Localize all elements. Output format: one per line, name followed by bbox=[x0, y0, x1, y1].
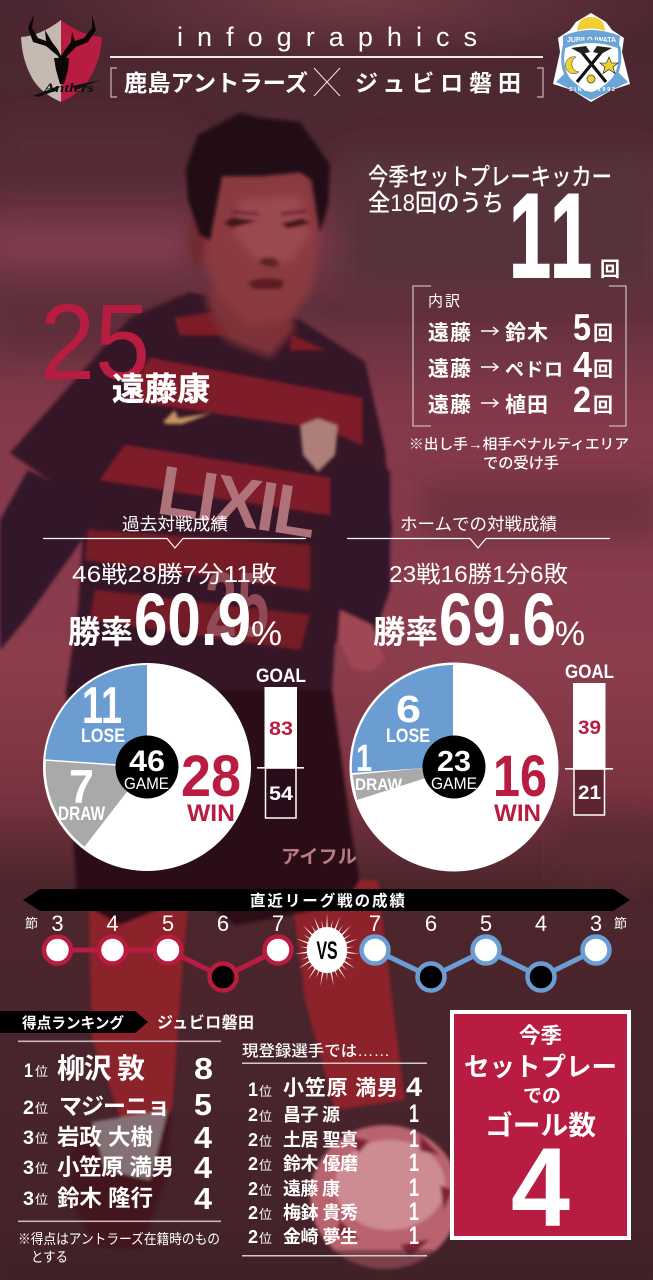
panel: current squad ranking: 位 bbox=[259, 1207, 272, 1222]
callout: set-piece goals bbox=[452, 1012, 629, 1250]
pie chart: all-time: WIN bbox=[187, 800, 235, 827]
goal bar: all-time: GOAL bbox=[256, 666, 306, 687]
panel: scoring ranking: 8 bbox=[194, 1051, 213, 1086]
arms bbox=[0, 470, 88, 650]
panel: scoring ranking: 4 bbox=[194, 1150, 213, 1185]
panel: current squad ranking: 2 bbox=[248, 1105, 258, 1125]
pie chart: home bbox=[350, 662, 558, 872]
set-piece kicker stat: 回 bbox=[600, 259, 620, 281]
panel: current squad ranking: 2 bbox=[248, 1130, 258, 1150]
panel: current squad ranking: 遠藤 康 bbox=[283, 1179, 340, 1199]
panel: current squad ranking: 現登録選手では…… bbox=[242, 1042, 390, 1060]
panel: current squad ranking: 1 bbox=[248, 1080, 258, 1101]
panel: current squad ranking: 4 bbox=[406, 1072, 422, 1102]
breakdown box: での受け手 bbox=[483, 454, 559, 472]
panel: scoring ranking: 得点ランキング bbox=[22, 1014, 124, 1032]
panel: current squad ranking: 1 bbox=[409, 1174, 419, 1202]
callout: set-piece goals: 今季 bbox=[519, 1024, 562, 1048]
icon: VS burst bbox=[294, 913, 360, 987]
crest on jersey bbox=[300, 418, 338, 472]
panel: scoring ranking: 位 bbox=[35, 1192, 48, 1207]
panel: scoring ranking: とする bbox=[31, 1249, 68, 1265]
ball bbox=[310, 1125, 460, 1269]
panel: scoring ranking: 位 bbox=[35, 1064, 48, 1079]
callout: set-piece goals: セットプレー bbox=[464, 1052, 617, 1082]
panel: current squad ranking: 2 bbox=[248, 1227, 258, 1247]
set-piece kicker stat: 全18回のうち bbox=[368, 190, 504, 217]
pie chart: all-time bbox=[43, 663, 251, 871]
panel: current squad ranking: 小笠原 満男 bbox=[283, 1076, 398, 1100]
panel: home record heading: 69.6 bbox=[439, 578, 556, 661]
breakdown box: 遠藤 bbox=[428, 322, 471, 345]
logo: Jubilo Iwata crest: SINCE 1992 bbox=[569, 87, 615, 93]
panel: home record heading: % bbox=[555, 615, 585, 653]
panel: scoring ranking: 3 bbox=[23, 1158, 34, 1179]
callout: set-piece goals: 4 bbox=[511, 1125, 570, 1250]
panel: scoring ranking: 4 bbox=[194, 1181, 213, 1216]
player number and name bbox=[40, 281, 210, 407]
logo: Kashima Antlers crest bbox=[21, 14, 102, 102]
timeline: Jubilo form: 7 bbox=[369, 911, 381, 936]
goal bar: all-time bbox=[256, 666, 306, 818]
breakdown box: 内訳 bbox=[428, 293, 460, 310]
jersey lettering: 25 bbox=[205, 554, 269, 656]
breakdown box: 植田 bbox=[505, 394, 548, 417]
panel: home record heading: ホームでの対戦成績 bbox=[400, 515, 557, 534]
pie chart: home: LOSE bbox=[386, 726, 430, 747]
pie chart: all-time: 28 bbox=[181, 744, 241, 809]
panel: scoring ranking: ※得点はアントラーズ在籍時のもの bbox=[18, 1231, 220, 1247]
panel: scoring ranking: 鈴木 隆行 bbox=[57, 1186, 153, 1211]
timeline: Kashima form bbox=[25, 911, 292, 990]
breakdown box: 2 bbox=[573, 379, 591, 420]
jersey lettering bbox=[153, 451, 357, 868]
panel: scoring ranking: 小笠原 満男 bbox=[57, 1155, 174, 1180]
panel: current squad ranking: 位 bbox=[259, 1231, 272, 1246]
timeline: Kashima form: 6 bbox=[217, 911, 229, 936]
goal bar: all-time: 83 bbox=[269, 719, 293, 740]
goal bar: home: 39 bbox=[578, 718, 601, 739]
panel: current squad ranking: 位 bbox=[259, 1109, 272, 1124]
timeline: Kashima form: 4 bbox=[106, 911, 119, 936]
panel: home record heading bbox=[347, 515, 610, 661]
logo: Jubilo Iwata crest bbox=[553, 13, 630, 102]
pie chart: all-time: LOSE bbox=[81, 726, 125, 747]
pie chart: home: 6 bbox=[396, 689, 421, 731]
set-piece kicker stat: 1 bbox=[509, 169, 551, 303]
pie chart: all-time: GAME bbox=[124, 774, 169, 793]
set-piece kicker stat: 1 bbox=[550, 169, 592, 303]
panel: scoring ranking: 3 bbox=[23, 1128, 34, 1149]
pie chart: home: DRAW bbox=[355, 775, 403, 794]
goal bar: all-time: 54 bbox=[269, 784, 293, 805]
timeline: Kashima form: 7 bbox=[272, 911, 284, 936]
breakdown box: 5 bbox=[573, 307, 591, 348]
panel: current squad ranking: 1 bbox=[409, 1100, 419, 1128]
panel: all-time record heading: 60.9 bbox=[134, 578, 251, 661]
panel: current squad ranking: 位 bbox=[259, 1158, 272, 1173]
panel: current squad ranking: 2 bbox=[248, 1203, 258, 1223]
panel: all-time record heading: % bbox=[251, 615, 282, 653]
panel: current squad ranking: 1 bbox=[409, 1222, 419, 1250]
stripes bbox=[125, 358, 362, 445]
panel: current squad ranking: 位 bbox=[259, 1183, 272, 1198]
panel: scoring ranking: 岩政 大樹 bbox=[57, 1125, 153, 1150]
panel: current squad ranking: 1 bbox=[409, 1149, 419, 1177]
player number and name: 25 bbox=[40, 281, 150, 402]
panel: current squad ranking: 昌子 源 bbox=[283, 1105, 340, 1125]
timeline: Jubilo form: 節 bbox=[614, 916, 627, 931]
legs bbox=[88, 880, 190, 1130]
panel: current squad ranking: 位 bbox=[259, 1134, 272, 1149]
pie chart: home: 1 bbox=[356, 738, 372, 780]
pie chart: home: 16 bbox=[493, 744, 547, 809]
pie chart: home: GAME bbox=[431, 774, 477, 793]
panel: current squad ranking: 2 bbox=[248, 1179, 258, 1199]
icon: VS burst: VS bbox=[316, 937, 338, 964]
pie chart: all-time: 7 bbox=[69, 760, 94, 813]
header title: infographics bbox=[177, 22, 477, 52]
logo: Kashima Antlers crest: Antlers bbox=[43, 80, 94, 95]
timeline: Jubilo form bbox=[362, 911, 627, 990]
breakdown box: ※出し手→相手ペナルティエリア bbox=[409, 436, 629, 452]
breakdown box bbox=[409, 286, 629, 472]
panel: scoring ranking: 3 bbox=[23, 1189, 34, 1210]
set-piece kicker stat: 今季セットプレーキッカー bbox=[368, 164, 612, 191]
banner: recent league form bbox=[23, 889, 630, 911]
panel: scoring ranking: 5 bbox=[194, 1087, 212, 1122]
panel: current squad ranking: 1 bbox=[409, 1198, 419, 1226]
panel: all-time record heading: 勝率 bbox=[68, 614, 133, 650]
pie chart: home: 23 bbox=[437, 746, 471, 778]
panel: scoring ranking bbox=[0, 1011, 254, 1265]
panel: current squad ranking: 金崎 夢生 bbox=[283, 1227, 358, 1247]
torso and shorts bbox=[10, 292, 392, 925]
breakdown box: 回 bbox=[593, 395, 613, 417]
panel: current squad ranking: 土居 聖真 bbox=[283, 1130, 358, 1150]
panel: home record heading: 勝率 bbox=[373, 614, 438, 650]
panel: current squad ranking bbox=[242, 1042, 427, 1256]
breakdown box: ペドロ bbox=[505, 360, 563, 381]
timeline: Kashima form: 3 bbox=[51, 911, 64, 936]
timeline: Kashima form: 節 bbox=[25, 916, 38, 931]
panel: scoring ranking: ジュビロ磐田 bbox=[157, 1013, 254, 1032]
set-piece kicker stat bbox=[368, 164, 620, 303]
timeline: Jubilo form: 3 bbox=[590, 911, 602, 936]
panel: scoring ranking: 位 bbox=[35, 1131, 48, 1146]
logo: Jubilo Iwata crest: JUBILO IWATA bbox=[567, 37, 616, 44]
goal bar: home: GOAL bbox=[565, 662, 614, 683]
jersey lettering: LIXIL bbox=[153, 451, 323, 553]
panel: all-time record heading: 過去対戦成績 bbox=[122, 515, 228, 534]
pie chart: all-time: 11 bbox=[82, 677, 122, 735]
callout: set-piece goals: での bbox=[523, 1086, 561, 1107]
panel: scoring ranking: 4 bbox=[194, 1120, 213, 1155]
jersey lettering: アイフル bbox=[281, 847, 357, 868]
panel: scoring ranking: 2 bbox=[23, 1098, 34, 1119]
pie chart: all-time: 46 bbox=[129, 745, 165, 778]
panel: current squad ranking: 2 bbox=[248, 1154, 258, 1174]
goal bar: home bbox=[565, 662, 614, 815]
pie chart: all-time: DRAW bbox=[58, 804, 105, 825]
panel: scoring ranking: マジーニョ bbox=[59, 1093, 170, 1119]
panel: scoring ranking: 位 bbox=[35, 1101, 48, 1116]
timeline: Jubilo form: 5 bbox=[480, 911, 492, 936]
panel: current squad ranking: 1 bbox=[409, 1125, 419, 1153]
timeline: Jubilo form: 4 bbox=[535, 911, 547, 936]
panel: all-time record heading bbox=[43, 515, 306, 661]
breakdown box: 鈴木 bbox=[505, 322, 548, 345]
header title bbox=[110, 22, 543, 97]
goal bar: home: 21 bbox=[578, 783, 601, 804]
breakdown box: 遠藤 bbox=[428, 394, 471, 417]
breakdown box: 4 bbox=[573, 344, 592, 385]
timeline: Jubilo form: 6 bbox=[425, 911, 437, 936]
callout: set-piece goals: ゴール数 bbox=[485, 1110, 596, 1141]
timeline: Kashima form: 5 bbox=[162, 911, 174, 936]
panel: current squad ranking: 位 bbox=[259, 1084, 272, 1099]
panel: all-time record heading: 46戦28勝7分11敗 bbox=[72, 561, 277, 587]
ground texture tint bbox=[0, 1250, 653, 1280]
panel: scoring ranking: 位 bbox=[35, 1161, 48, 1176]
banner: recent league form: 直近リーグ戦の成績 bbox=[250, 891, 405, 910]
pie chart: home: WIN bbox=[494, 800, 541, 827]
breakdown box: 回 bbox=[593, 359, 613, 381]
breakdown box: 遠藤 bbox=[428, 358, 471, 381]
panel: scoring ranking: 柳沢 敦 bbox=[57, 1053, 145, 1084]
panel: current squad ranking: 梅鉢 貴秀 bbox=[283, 1202, 358, 1223]
header title: ジュビロ磐田 bbox=[355, 70, 521, 96]
panel: home record heading: 23戦16勝1分6敗 bbox=[389, 561, 568, 587]
panel: scoring ranking: 1 bbox=[24, 1061, 33, 1082]
panel: current squad ranking: 鈴木 優磨 bbox=[283, 1154, 358, 1174]
breakdown box: 回 bbox=[593, 323, 613, 345]
face bbox=[188, 170, 320, 358]
header title: 鹿島アントラーズ bbox=[124, 70, 308, 96]
player number and name: 遠藤康 bbox=[112, 371, 210, 407]
